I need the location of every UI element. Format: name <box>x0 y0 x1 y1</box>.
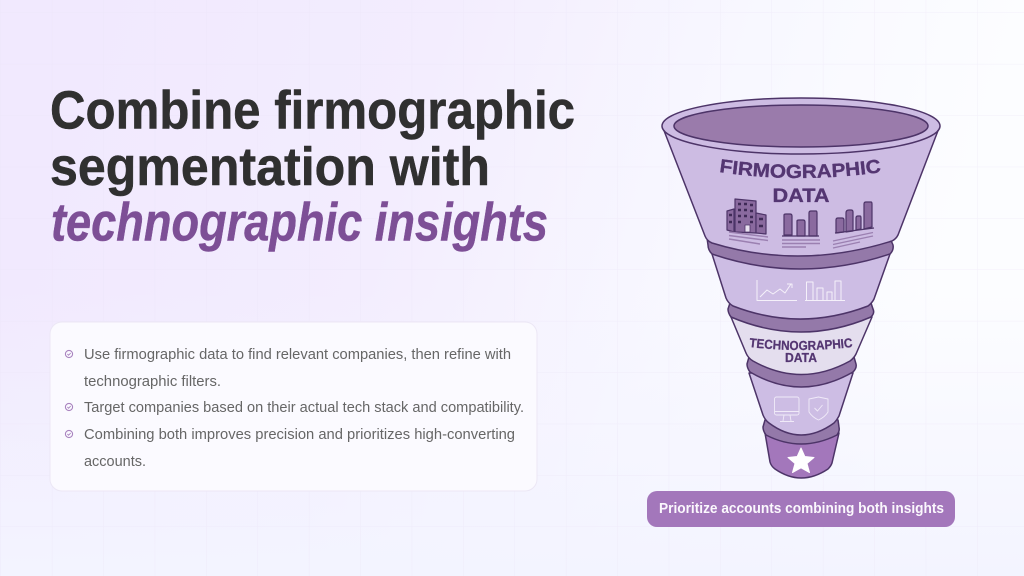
title: technographic insights <box>51 192 548 252</box>
bullet: combined precision: Combining both improves precision and prioritizes high-converting <box>84 427 515 443</box>
icon: star <box>788 448 814 472</box>
label: firmographic data: DATA <box>772 186 830 207</box>
panel: key points <box>50 322 537 491</box>
bullet: combined precision <box>65 427 515 470</box>
icon: shield <box>809 397 828 420</box>
bullet: firmographic refinement <box>65 347 511 390</box>
label: technographic data: TECHNOGRAPHIC <box>750 338 852 350</box>
funnel segment 2: chart icons <box>707 238 893 319</box>
callout: prioritize accounts: Prioritize accounts combining both insights <box>659 501 944 517</box>
funnel segment 3: technographic data <box>727 304 874 376</box>
funnel segment 1: firmographic data <box>661 97 941 257</box>
title <box>50 80 575 252</box>
label: firmographic data <box>720 159 880 207</box>
label: technographic data: DATA <box>785 350 818 365</box>
funnel segment 4: monitor and shield <box>747 357 856 435</box>
callout: prioritize accounts <box>647 491 955 527</box>
funnel segment 5: star <box>763 415 839 478</box>
bullet: combined precision: accounts. <box>84 454 146 470</box>
bullet: firmographic refinement: Use firmographic data to find relevant companies, then refine with <box>84 347 511 363</box>
title: segmentation with <box>50 137 490 197</box>
icon: bar chart <box>805 281 845 300</box>
icon: three bars <box>782 211 819 236</box>
label: technographic data <box>750 338 852 365</box>
icon: four bars <box>835 202 874 233</box>
caption lines under icons <box>729 232 873 248</box>
label: firmographic data: FIRMOGRAPHIC <box>720 159 880 178</box>
title: Combine firmographic <box>50 80 575 140</box>
bullet: firmographic refinement: technographic filters. <box>84 374 221 390</box>
funnel opening <box>674 105 928 147</box>
icon: monitor <box>774 397 799 422</box>
icon: office building <box>727 199 766 234</box>
icon: line chart <box>757 280 797 300</box>
funnel <box>661 97 941 479</box>
bullet: tech stack targeting: Target companies based on their actual tech stack and compatibility. <box>84 400 524 416</box>
funnel rim <box>662 98 940 154</box>
